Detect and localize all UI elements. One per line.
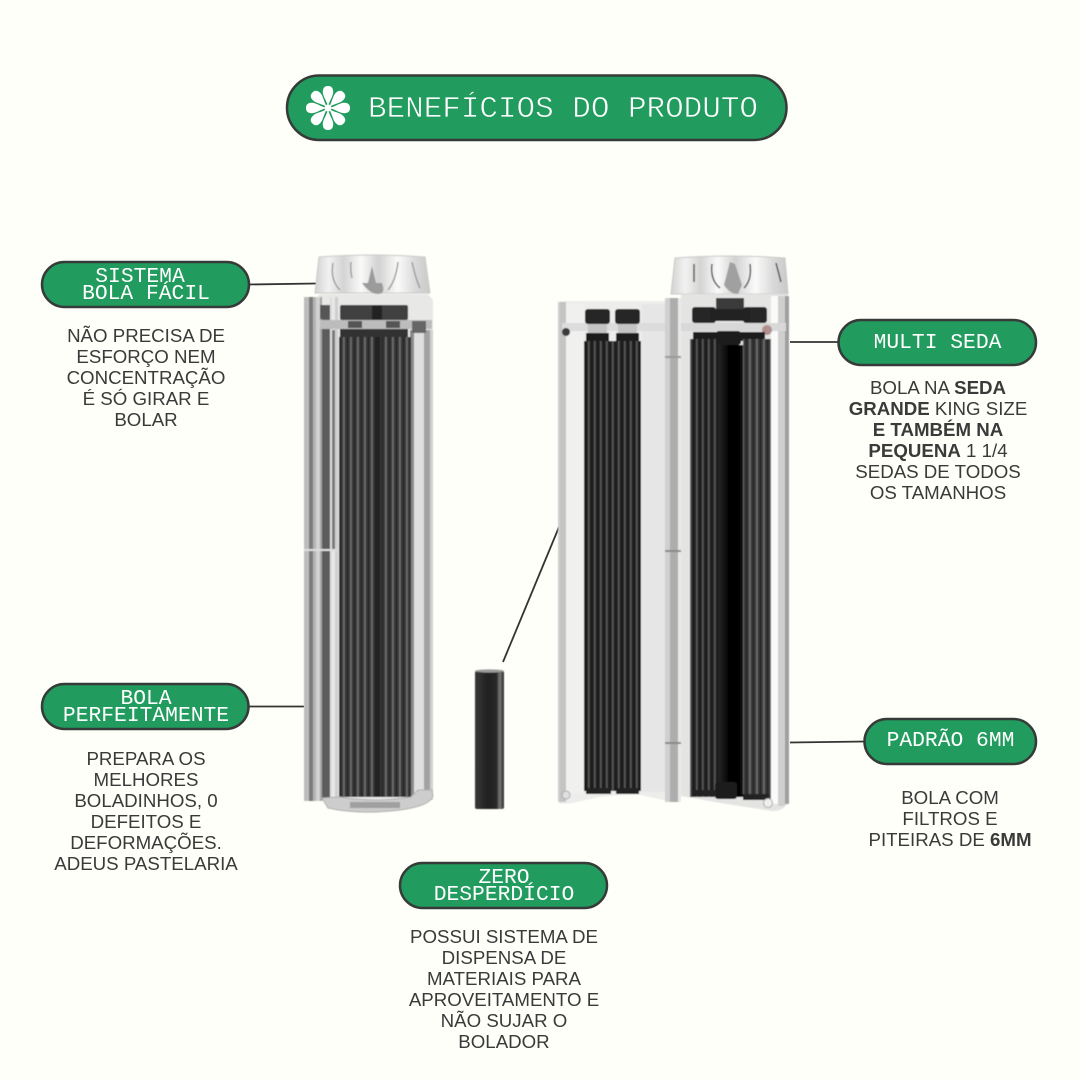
text block: NÃO PRECISA DE [67,325,225,346]
gears [320,305,330,319]
text block: BOLA NA SEDA [870,377,1006,398]
text block: SEDAS DE TODOS [855,461,1021,482]
callout: bola perfeitamente: BOLA [120,687,172,711]
text block: PREPARA OS [86,748,206,769]
product: closed roller device [304,255,433,812]
callout: sistema bola fácil: BOLA FÁCIL [82,280,210,306]
text block: BOLADOR [458,1031,550,1052]
text block: FILTROS E [902,808,998,829]
callout: sistema bola fácil [42,262,249,430]
text block: APROVEITAMENTO E [409,989,599,1010]
text block: POSSUI SISTEMA DE [410,926,598,947]
text block: ESFORÇO NEM [76,346,216,367]
callout: padrão 6mm: PADRÃO 6MM [887,727,1014,753]
icon: flower [306,86,350,130]
text block: PEQUENA [868,440,961,461]
callout: zero desperdício: ZERO [478,866,530,890]
text block: DISPENSA DE [442,947,566,968]
text block: BOLAR [114,409,178,430]
hinge [665,298,670,802]
text block: DEFORMAÇÕES. [70,832,222,853]
right rollers [692,307,716,323]
shell stripes [304,297,309,801]
left rollers [585,309,610,324]
product: black stick [475,669,504,809]
right half shell [681,294,788,811]
callout: bola perfeitamente: PERFEITAMENTE [63,704,229,728]
callout: sistema bola fácil: SISTEMA [95,265,185,289]
text block: É SÓ GIRAR E [83,388,209,409]
text block: E TAMBÉM NA [873,419,1003,440]
ribbed rollers [339,337,376,797]
product: open roller device [558,256,789,811]
cap [315,255,430,293]
title banner: BENEFÍCIOS DO PRODUTO [368,90,758,127]
text block: BOLA COM [901,787,999,808]
text block: CONCENTRAÇÃO [67,367,225,388]
callout: padrão 6mm [864,719,1036,850]
text block: MATERIAIS PARA [427,968,582,989]
text block: MELHORES [94,769,198,790]
text block: NÃO SUJAR O [441,1010,567,1031]
callout: bola perfeitamente [42,684,248,874]
text block: PITEIRAS DE [868,829,990,850]
callout: multi seda [838,320,1036,503]
text block: GRANDE [849,398,930,419]
text block: KING SIZE [935,398,1027,419]
text block: BOLADINHOS, 0 [74,790,218,811]
callout: multi seda: MULTI SEDA [874,331,1002,355]
text block: OS TAMANHOS [870,482,1006,503]
cap [671,256,788,294]
connector lines [248,284,865,742]
body [304,294,433,812]
base ring [322,790,433,812]
text block: ADEUS PASTELARIA [54,853,238,874]
text block: 1 1/4 [966,440,1008,461]
left half shell [558,301,668,804]
text block: 6MM [990,829,1032,850]
callout: zero desperdício [400,863,607,1052]
callout: zero desperdício: DESPERDÍCIO [434,881,574,907]
title banner [287,76,786,140]
text block: DEFEITOS E [91,811,201,832]
